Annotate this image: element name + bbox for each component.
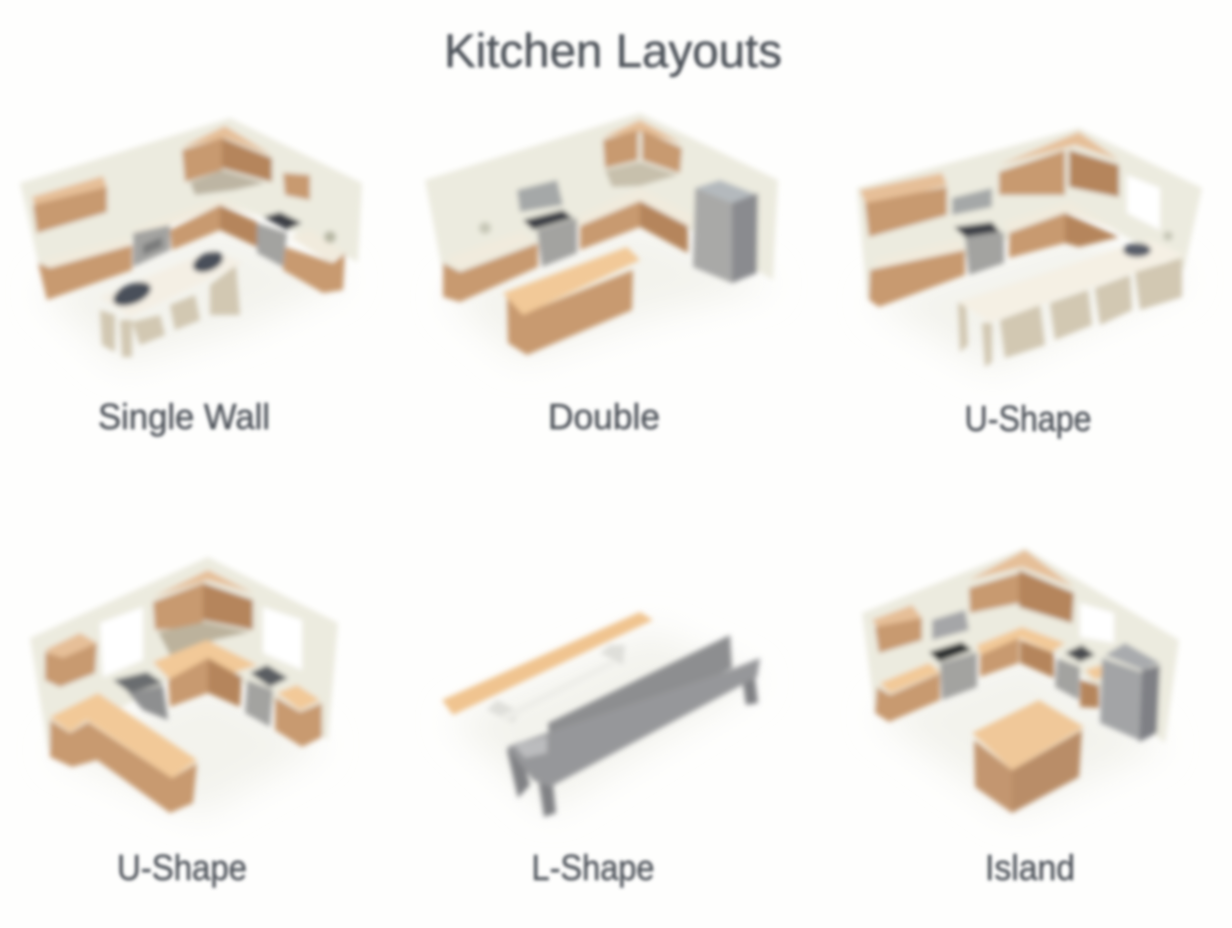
upper cabinets xyxy=(45,570,253,687)
upper cabinets xyxy=(872,550,1074,653)
base cabinets and counter xyxy=(869,202,1122,307)
peninsula xyxy=(50,693,197,813)
refrigerator xyxy=(1100,643,1160,742)
plank table xyxy=(442,612,653,723)
wall xyxy=(20,118,362,280)
gray bench xyxy=(507,635,760,817)
label: l-shape: L-Shape xyxy=(532,847,654,888)
panel: island kitchen xyxy=(862,548,1179,813)
wall xyxy=(425,113,778,285)
base cabinets and counter xyxy=(153,640,322,747)
stoves xyxy=(113,665,288,727)
title: Kitchen Layouts xyxy=(444,24,782,77)
refrigerator xyxy=(693,180,758,283)
label: double: Double xyxy=(548,396,660,437)
panel: u-shape kitchen with peninsula xyxy=(30,557,338,813)
label: u-shape top: U-Shape xyxy=(964,398,1092,439)
window xyxy=(1080,603,1114,643)
label: single wall: Single Wall xyxy=(98,396,270,437)
island xyxy=(503,247,640,355)
stoves with hood xyxy=(929,610,1095,700)
base cabinets and counter xyxy=(875,627,1102,722)
base cabinets and counter xyxy=(38,198,345,300)
long table with chairs xyxy=(958,231,1185,367)
label: island: Island xyxy=(985,847,1075,888)
upper cabinets xyxy=(860,132,1119,237)
wall xyxy=(30,557,338,750)
panel: l-shape bench and plank xyxy=(442,612,760,817)
floor shadows xyxy=(40,220,1190,815)
wall xyxy=(862,548,1179,743)
stove with hood xyxy=(952,188,1004,275)
base cabinets and counter xyxy=(443,188,692,302)
label: u-shape bottom: U-Shape xyxy=(117,847,247,888)
panel: u-shape kitchen with long table xyxy=(857,128,1202,367)
wall xyxy=(857,128,1202,300)
panel: double kitchen xyxy=(425,113,778,355)
window xyxy=(1127,175,1160,230)
island xyxy=(972,700,1084,813)
island with cooktops xyxy=(100,248,243,357)
upper cabinets xyxy=(603,120,682,187)
panel: single wall kitchen xyxy=(20,118,362,357)
ovens and stove xyxy=(133,212,336,267)
stove with hood xyxy=(517,180,577,267)
upper cabinets xyxy=(32,126,310,233)
windows xyxy=(100,607,302,677)
